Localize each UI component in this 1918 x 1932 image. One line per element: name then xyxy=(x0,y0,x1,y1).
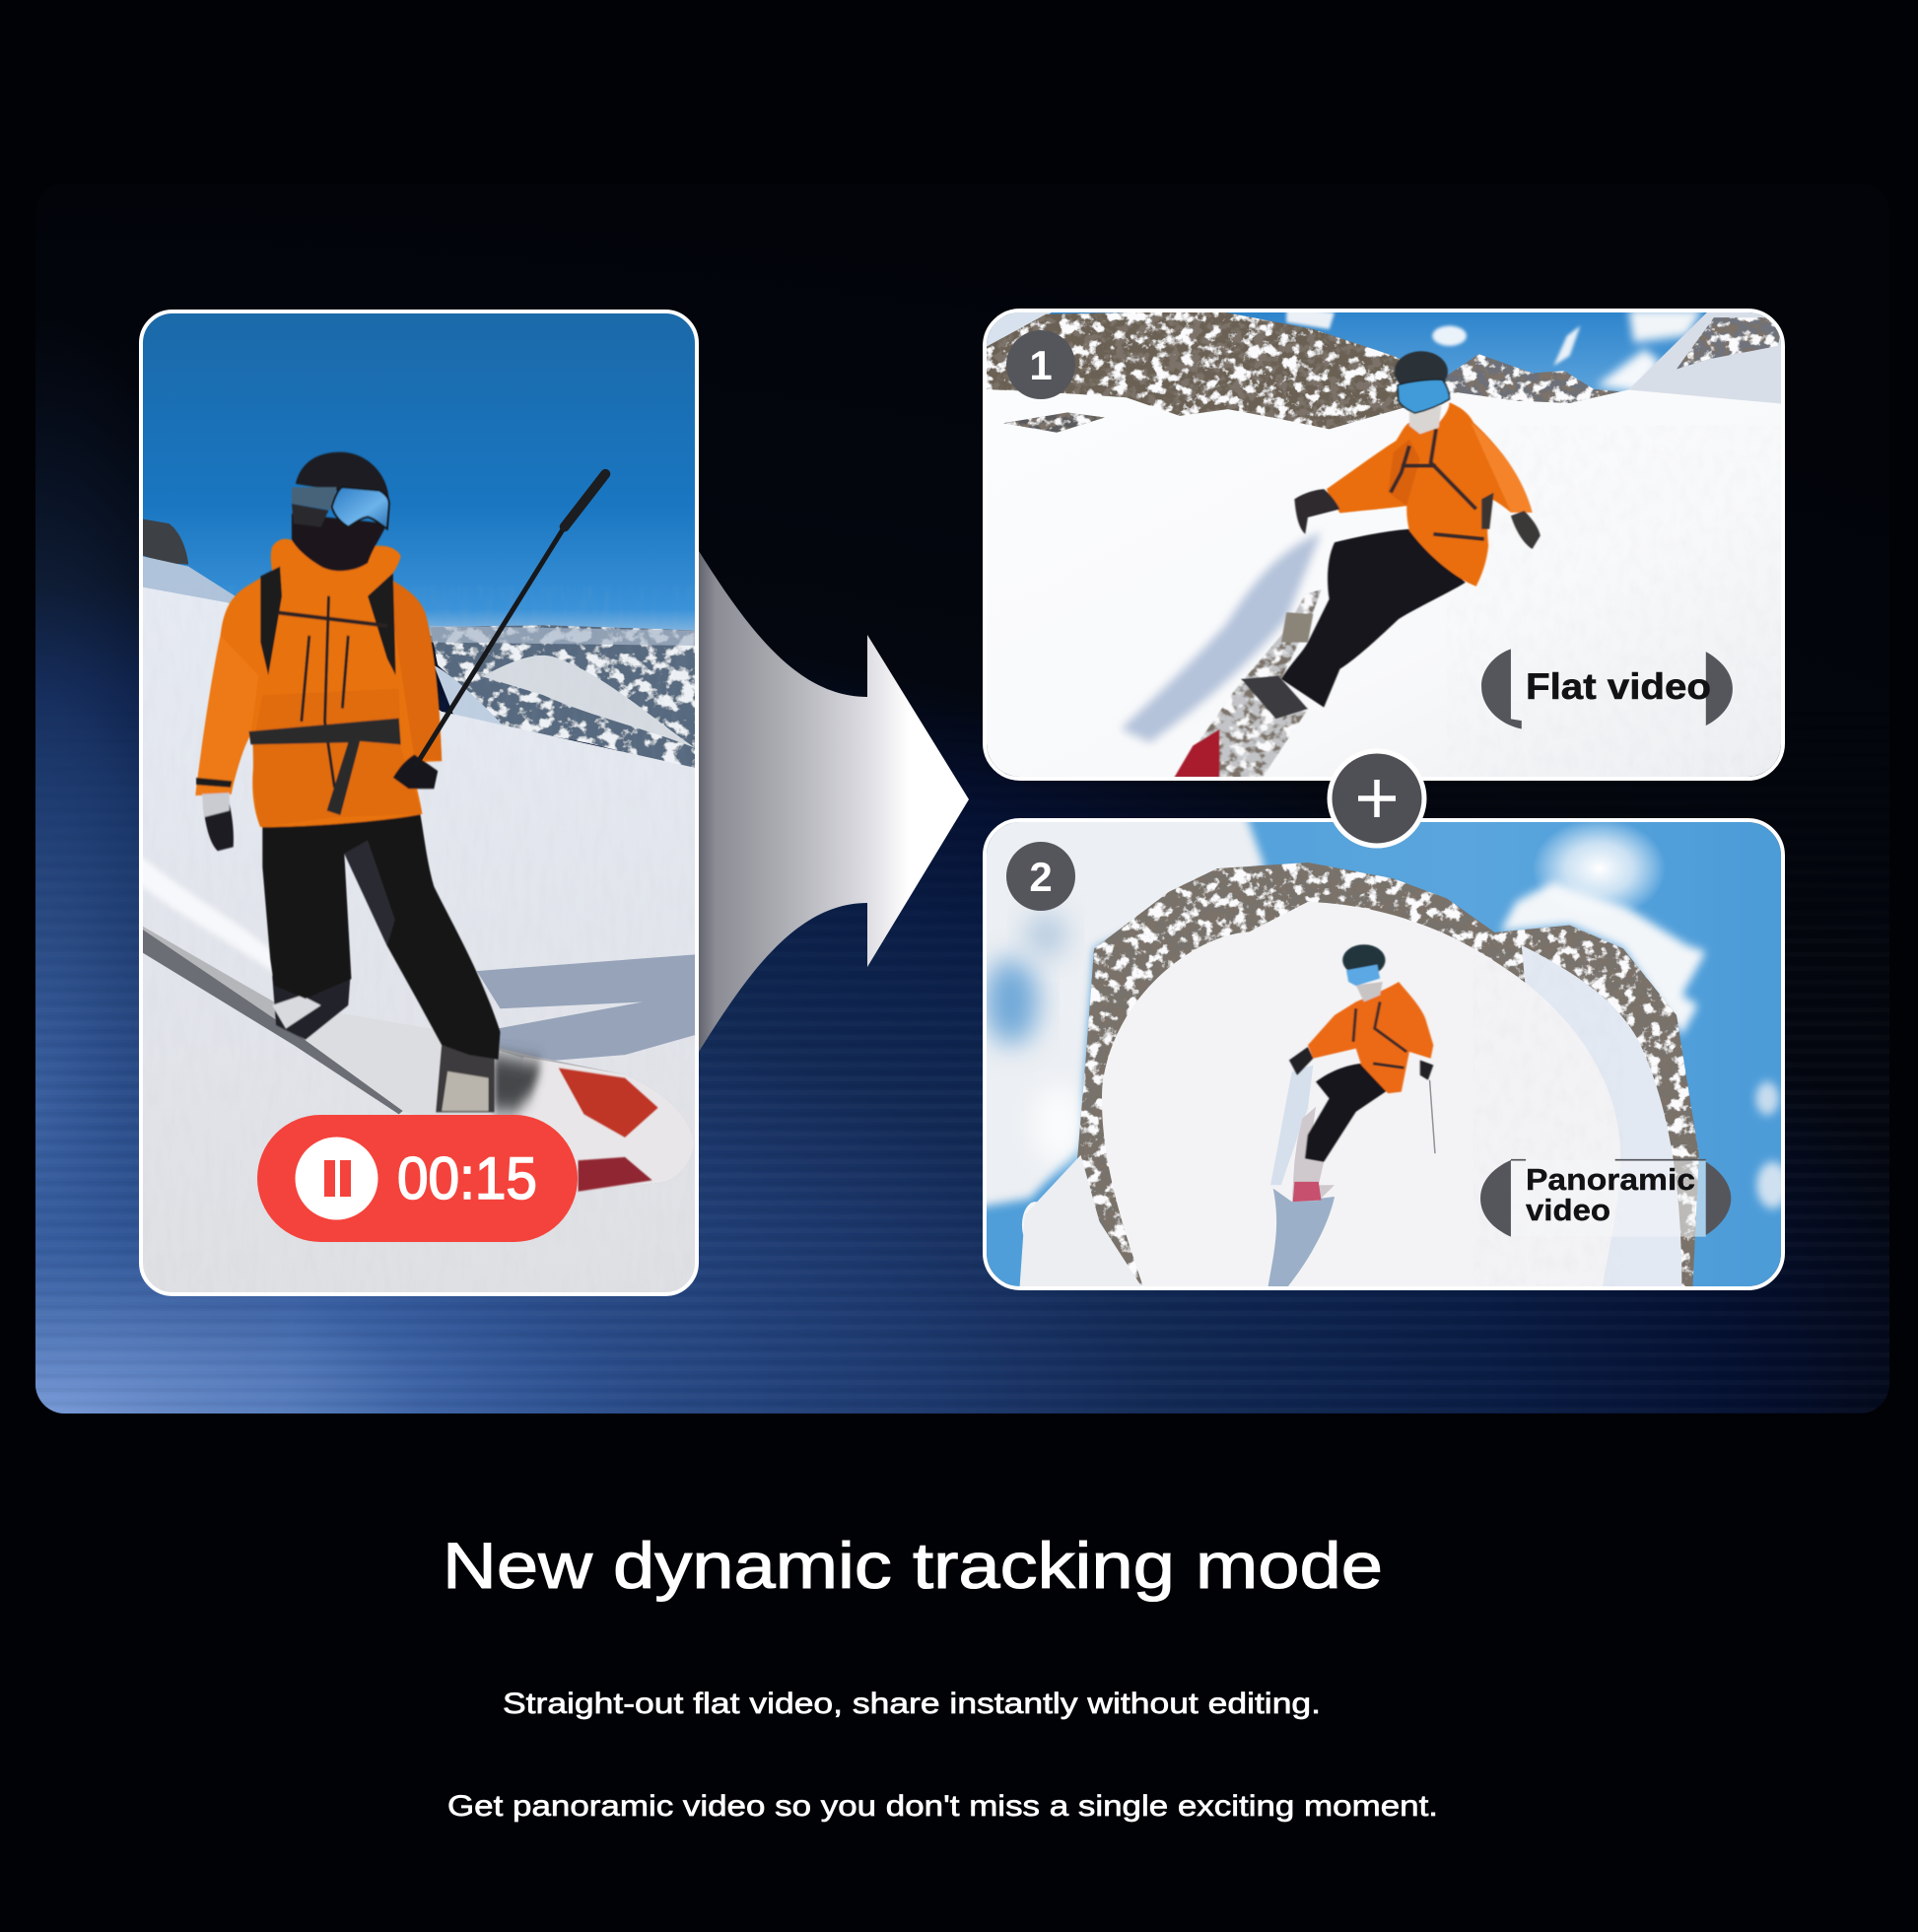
trousers xyxy=(1281,529,1466,708)
snowboard xyxy=(143,927,694,1192)
description: flat video: Straight-out flat video, share instantly without editing. xyxy=(503,1688,1321,1720)
title: New dynamic tracking mode xyxy=(443,1529,1383,1602)
panel: panoramic video card xyxy=(971,808,1789,1291)
face and helmet xyxy=(1409,406,1441,434)
gloves xyxy=(203,804,234,851)
foreground snow xyxy=(1019,1155,1145,1291)
photo: flat video snowboarder xyxy=(982,306,1789,786)
shadow on snow xyxy=(477,954,695,1065)
label: flat video: Flat video xyxy=(1526,666,1711,707)
panel: recording photo card xyxy=(138,306,699,1302)
rear boot xyxy=(272,976,350,1040)
backpack straps xyxy=(260,567,282,675)
back slope xyxy=(1522,945,1681,1291)
icon: plus joining both videos xyxy=(1330,751,1424,846)
photo: snowboarder holding selfie stick xyxy=(138,306,699,1302)
orange jacket xyxy=(1308,982,1433,1093)
pole xyxy=(1430,1080,1435,1153)
label: flat video xyxy=(1481,649,1733,729)
face and helmet xyxy=(1356,982,1383,1001)
snowboarder figure xyxy=(1281,351,1541,708)
icon: pause button xyxy=(296,1138,378,1220)
snowboard xyxy=(1292,1107,1335,1202)
orange jacket xyxy=(1327,402,1533,586)
arrow: from recording to two outputs xyxy=(699,551,969,1052)
ski goggles xyxy=(1346,964,1380,986)
sun glow xyxy=(1533,818,1666,919)
snowboarder figure xyxy=(195,452,501,1112)
orange jacket xyxy=(195,539,442,827)
planet rocks xyxy=(1075,862,1699,1291)
ski goggles xyxy=(1398,380,1450,413)
number badge 1 xyxy=(1006,330,1075,399)
timer readout: 00:15 xyxy=(397,1145,537,1211)
number badge 2 xyxy=(1006,842,1075,911)
gloves xyxy=(1289,1047,1313,1075)
number badge 1: 1 xyxy=(1029,342,1053,388)
panel: flat video card xyxy=(982,306,1789,786)
front boot xyxy=(436,1045,495,1112)
recording timer pill xyxy=(257,1115,578,1242)
label: panoramic video: Panoramic xyxy=(1526,1162,1695,1197)
trousers xyxy=(262,804,501,1060)
label: panoramic video xyxy=(1480,1159,1731,1237)
selfie stick xyxy=(415,526,565,768)
snowboard xyxy=(1174,589,1321,778)
jacket straps and zips xyxy=(278,596,387,788)
harness straps xyxy=(1391,429,1484,539)
snow spray shadow xyxy=(1121,532,1321,742)
snow shadow xyxy=(1267,1189,1335,1288)
mountains xyxy=(987,312,1447,430)
label: panoramic video: video xyxy=(1526,1193,1610,1227)
balaclava and helmet xyxy=(292,514,387,571)
number badge 2: 2 xyxy=(1029,854,1053,900)
ski goggles xyxy=(332,487,389,528)
panel: blue gradient backdrop xyxy=(35,333,1889,1414)
gloves xyxy=(1294,489,1339,534)
description: panoramic video: Get panoramic video so you don't miss a single exciting moment. xyxy=(447,1790,1438,1823)
trousers xyxy=(1305,1064,1388,1162)
snowboarder figure xyxy=(1289,944,1433,1162)
snowfield xyxy=(982,389,1786,786)
photo: tiny planet snowboarder xyxy=(971,808,1789,1291)
clouds xyxy=(971,808,1789,1248)
